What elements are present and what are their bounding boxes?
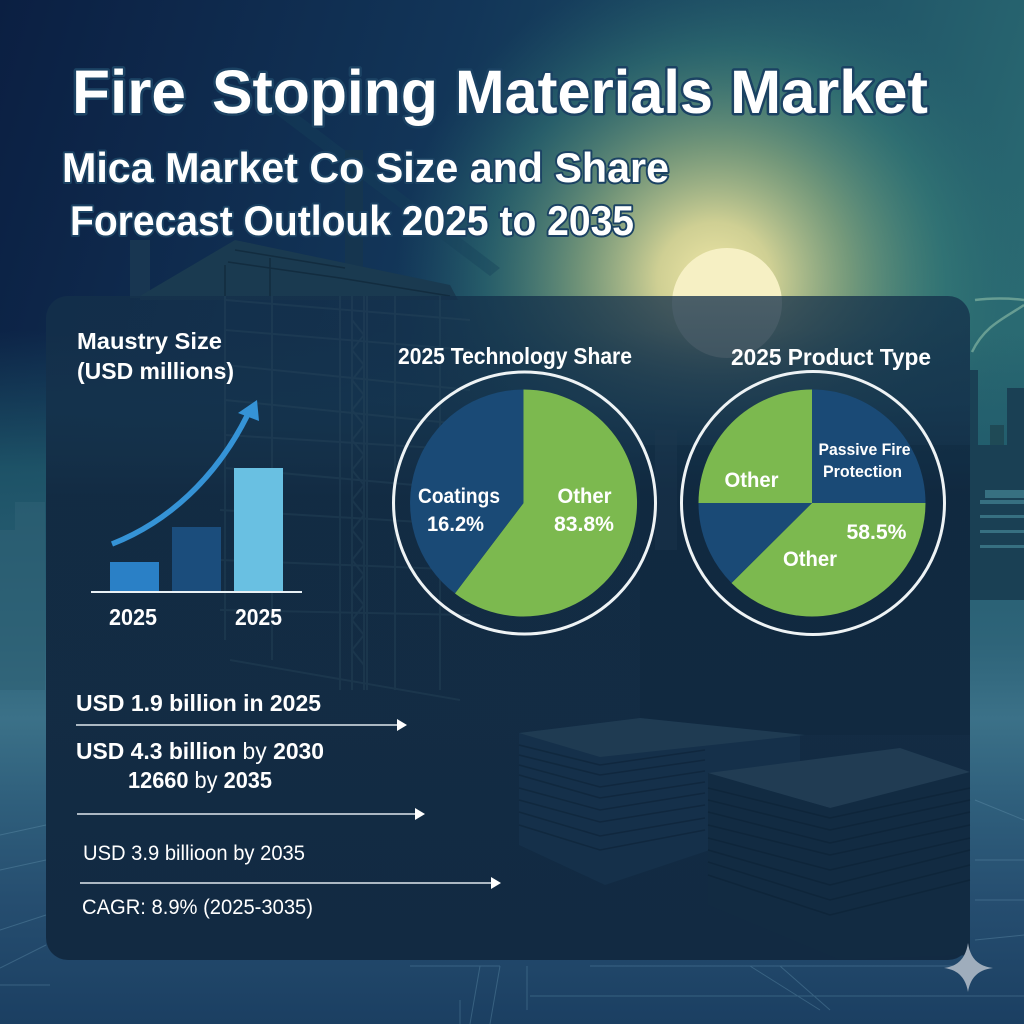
pie chart: technology share: Coatings [418,485,500,508]
text block: market values: USD 4.3 billion by 2030 [76,738,324,764]
text block: market values: USD 3.9 billioon by 2035 [83,842,305,865]
text block: market values: CAGR: 8.9% (2025-3035) [82,896,313,919]
icon: sparkle star [944,943,993,992]
pie chart: product type: 58.5% [846,521,907,544]
pie chart: product type [682,344,944,634]
pie chart: technology share: Other [558,485,612,508]
pie chart: technology share [394,343,656,634]
title: Stoping [212,58,438,126]
pie chart: product type: Protection [823,462,902,481]
heading: industry size: (USD millions) [77,358,234,384]
heading: technology share: 2025 Technology Share [398,343,632,369]
pie chart: technology share: 16.2% [427,513,484,536]
pie chart: product type: Other [724,469,778,492]
bar chart: 2025 [235,604,282,630]
title [72,58,928,126]
heading: industry size [77,328,234,384]
bar chart: 2025 [109,604,157,630]
text block: market values: 12660 by 2035 [128,767,272,793]
panel: market data [46,296,970,960]
title: Fire [72,58,186,126]
subtitle: Forecast Outlouk 2025 to 2035 [70,197,634,244]
pie chart: product type: Passive Fire [818,440,910,459]
title: Market [730,58,928,126]
background: crane and building above panel [130,92,500,300]
pie chart: technology share: 83.8% [554,513,614,536]
background detail: building inside panel [220,296,970,735]
subtitle: Mica Market Co Size and Share [62,144,669,191]
subtitle [62,144,669,244]
background: skyline [0,370,1024,690]
arrow: growth trend [112,400,259,544]
text block: market values: USD 1.9 billion in 2025 [76,690,321,716]
bar chart [91,468,302,630]
background: blueprint floor lines [0,800,1024,1024]
title: Materials [455,58,713,126]
heading: product type: 2025 Product Type [731,344,931,370]
heading: industry size: Maustry Size [77,328,222,354]
pie chart: product type: Other [783,548,837,571]
text block: market values [76,690,501,919]
background detail: stacked boards [519,718,970,960]
